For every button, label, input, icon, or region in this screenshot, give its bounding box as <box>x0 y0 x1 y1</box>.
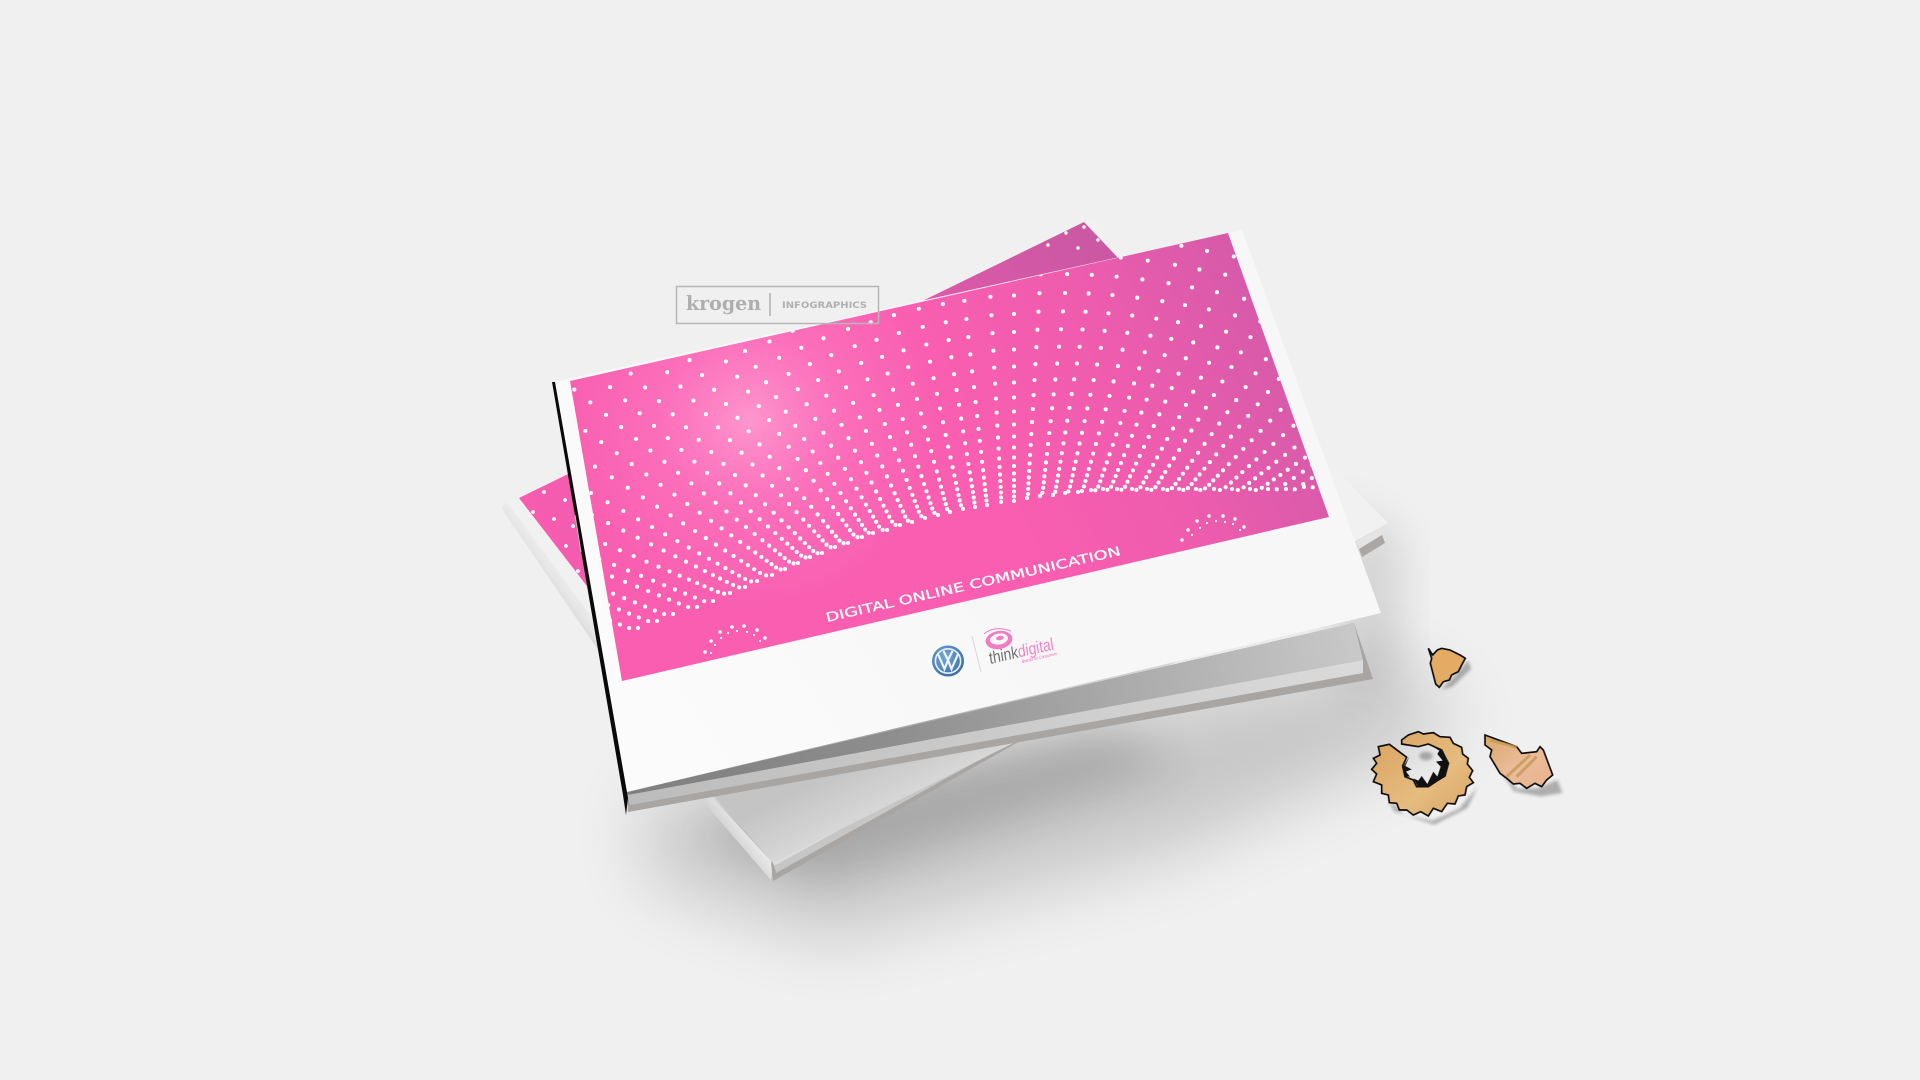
top book: cover <box>554 230 1381 792</box>
logo: Volkswagen <box>932 646 964 676</box>
thinkdigital swirl icon <box>984 629 1014 651</box>
curled shaving <box>1372 732 1473 816</box>
thinkdigital wordmark: thinkdigital <box>988 635 1055 668</box>
krogen wordmark: krogen <box>686 291 761 315</box>
lower book <box>502 218 1388 881</box>
title: DIGITAL ONLINE COMMUNICATION <box>824 543 1122 625</box>
infographics label: INFOGRAPHICS <box>782 301 867 311</box>
top shaving <box>1428 648 1465 687</box>
dotted dome pattern <box>572 244 1315 630</box>
top book: page block and inside of cover <box>627 623 1373 812</box>
cast shadows of the stacked books <box>640 500 1470 940</box>
lower book: shaded part of cover <box>700 600 1300 863</box>
krogen infographics badge <box>676 286 878 324</box>
thinkdigital tagline: Brands for Consumers <box>1021 651 1058 664</box>
small dot arc, lower left of the cover <box>703 624 767 654</box>
shavings shadow <box>1377 660 1562 825</box>
lower book: right corner pages <box>1357 523 1388 557</box>
top book: pink cover panel <box>570 233 1329 681</box>
top book: black spine strip <box>552 382 628 815</box>
lower book: pink cover art <box>519 222 1122 590</box>
scene: stacked book mockup on a light background <box>502 222 1564 961</box>
logo divider <box>972 636 981 672</box>
right shaving <box>1485 735 1553 788</box>
lower book: cover dots <box>531 225 1100 573</box>
lower book: cover <box>507 218 1388 863</box>
lower book: spine edge <box>502 502 773 880</box>
lower book: fore edge with pages <box>771 680 1110 881</box>
pencil shavings <box>1372 648 1562 825</box>
logo: thinkdigital <box>984 629 1058 668</box>
inner black spikes of the curl <box>1413 745 1449 787</box>
small dot arc, lower right of the cover <box>1180 514 1246 542</box>
